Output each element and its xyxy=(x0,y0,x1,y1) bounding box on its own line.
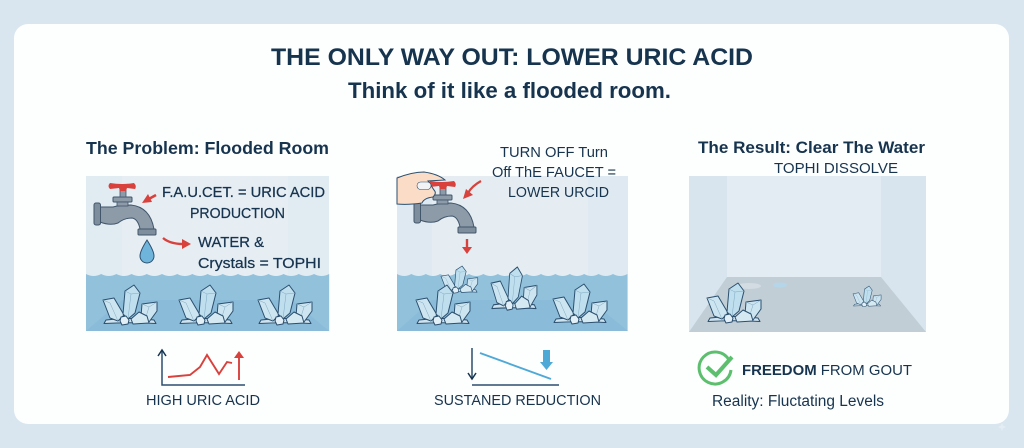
label: high uric acid: HIGH URIC ACID xyxy=(146,393,260,409)
instruction text: TURN OFF Turn xyxy=(500,145,608,161)
icon: hand xyxy=(397,172,445,204)
instruction text: LOWER URCID xyxy=(508,185,609,201)
flooded room scene xyxy=(86,176,329,331)
icon: faucet xyxy=(94,183,156,235)
reality label: Reality: Fluctating Levels xyxy=(712,393,884,410)
water xyxy=(86,274,329,331)
freedom from gout label: FREEDOM FROM GOUT xyxy=(742,363,912,379)
icon: green check xyxy=(699,352,732,384)
crystals xyxy=(103,285,312,325)
water xyxy=(397,274,627,331)
label: sustained reduction: SUSTANED REDUCTION xyxy=(434,393,601,409)
reduced water room scene xyxy=(397,172,628,331)
arrow to faucet xyxy=(142,194,156,203)
arrow to handle xyxy=(463,181,481,199)
small crystal xyxy=(853,286,881,307)
chart: sustained reduction xyxy=(468,348,559,385)
corner sparkle xyxy=(998,423,1006,431)
faucet label: F.A.U.CET. = URIC ACID xyxy=(162,185,325,201)
icon: water drop xyxy=(140,240,154,263)
production label: PRODUCTION xyxy=(190,206,285,222)
crystals label: Crystals = TOPHI xyxy=(198,256,321,272)
tophi dissolve label: TOPHI DISSOLVE xyxy=(774,161,898,177)
heading: the problem: The Problem: Flooded Room xyxy=(86,138,329,158)
instruction text xyxy=(492,145,616,201)
water label: WATER & xyxy=(198,235,264,251)
crystals xyxy=(416,266,607,325)
panel: the result xyxy=(689,138,926,410)
empty room scene xyxy=(689,176,926,332)
arrow to water label xyxy=(163,238,191,249)
heading: the result: The Result: Clear The Water xyxy=(698,138,925,157)
title: THE ONLY WAY OUT: LOWER URIC ACID xyxy=(271,44,753,71)
icon: faucet xyxy=(414,181,476,233)
arrow down xyxy=(462,239,472,254)
instruction text: Off ThE FAUCET = xyxy=(492,165,616,181)
large crystal xyxy=(707,283,761,323)
chart: high uric acid xyxy=(158,350,245,385)
panel: the problem xyxy=(86,138,329,409)
subtitle: Think of it like a flooded room. xyxy=(348,78,671,103)
panel: turn off the faucet xyxy=(397,145,628,409)
